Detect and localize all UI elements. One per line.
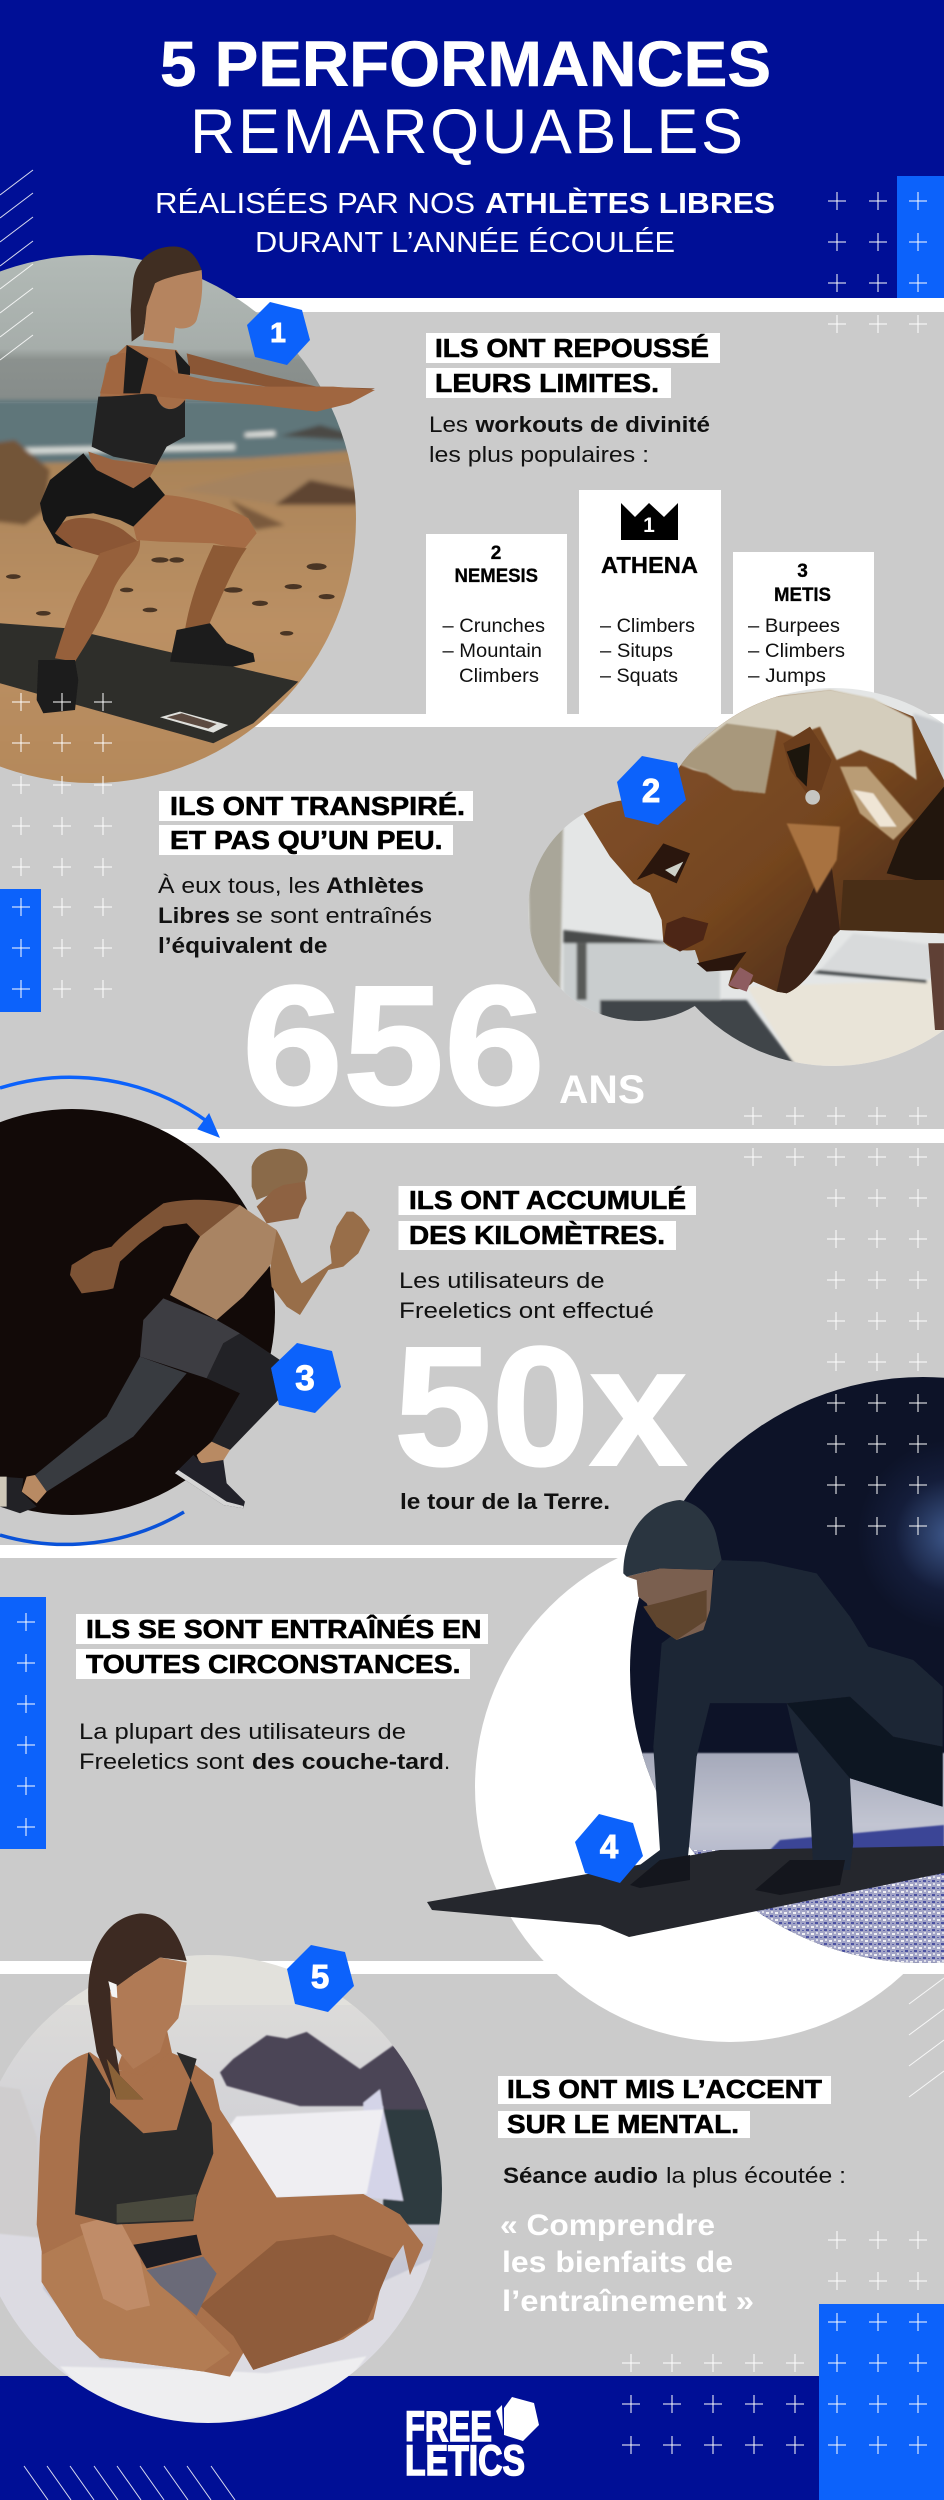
text: users bbox=[399, 1268, 654, 1323]
title: 5 PERFORMANCES bbox=[160, 28, 771, 100]
text: tour de la terre: le tour de la Terre. bbox=[400, 1489, 610, 1514]
plus grid right section 2-3 bbox=[744, 1107, 927, 1371]
diagonal lines bottom left bbox=[24, 2466, 235, 2500]
badge 1: 1 bbox=[270, 317, 286, 348]
text: couche-tard: La plupart des utilisateurs de bbox=[79, 1719, 406, 1744]
podium: metis: 3 bbox=[797, 561, 808, 582]
diagonal lines top left bbox=[0, 170, 33, 242]
text: trained: l’équivalent de bbox=[158, 933, 328, 958]
text: workouts bbox=[429, 412, 710, 467]
heading 4: TOUTES CIRCONSTANCES. bbox=[86, 1649, 460, 1679]
quote: l’entraînement » bbox=[502, 2285, 754, 2318]
heading 1: LEURS LIMITES. bbox=[435, 368, 659, 398]
text: users: Les utilisateurs de bbox=[399, 1268, 604, 1293]
plus grid top right bbox=[828, 192, 927, 333]
podium: nemesis: 2 bbox=[491, 543, 501, 564]
title bbox=[160, 28, 771, 167]
podium: metis: – Jumps bbox=[748, 666, 826, 687]
plus grid over photo 4 bbox=[827, 1394, 927, 1535]
title: REMARQUABLES bbox=[190, 97, 743, 167]
podium: nemesis: – Mountain bbox=[442, 641, 542, 662]
badge 5 bbox=[287, 1945, 354, 2012]
logo: freeletics: LETICS bbox=[405, 2437, 525, 2485]
podium: athena: – Climbers bbox=[600, 616, 695, 637]
photo 2: athlete face bbox=[520, 680, 944, 1080]
subtitle: DURANT L’ANNÉE ÉCOULÉE bbox=[255, 226, 675, 259]
heading 4: ILS SE SONT ENTRAÎNÉS EN bbox=[86, 1614, 482, 1644]
heading 5 bbox=[498, 2074, 831, 2139]
icon: crown: 1 bbox=[643, 514, 655, 537]
heading 4 bbox=[76, 1614, 488, 1679]
heading 5: ILS ONT MIS L’ACCENT bbox=[507, 2074, 822, 2104]
blue block bottom right bbox=[819, 2304, 944, 2500]
photo 1: woman squatting on the beach bbox=[0, 247, 380, 800]
blue strip section 4 bbox=[0, 1597, 46, 1849]
photo 3: runner bbox=[0, 1109, 370, 1515]
big number 50x: 50x bbox=[394, 1312, 687, 1502]
text: trained: Athlètes bbox=[326, 873, 424, 898]
badge 3 bbox=[271, 1343, 341, 1413]
podium: athena bbox=[579, 490, 721, 715]
icon: crown bbox=[621, 503, 678, 540]
badge 2 bbox=[617, 756, 686, 825]
photo 5: woman meditating bbox=[0, 1914, 450, 2441]
plus grid bottom right bbox=[622, 2231, 927, 2454]
plus grid left bbox=[12, 693, 112, 876]
heading 1 bbox=[426, 333, 720, 398]
diagonal lines over photo 1 bbox=[0, 241, 33, 360]
text: trained: À eux tous, les bbox=[158, 873, 320, 898]
badge 1 bbox=[247, 302, 310, 365]
text: seance audio: Séance audio bbox=[503, 2163, 658, 2188]
badge 4: 4 bbox=[600, 1828, 619, 1865]
podium: metis: – Climbers bbox=[748, 641, 845, 662]
podium: athena: – Squats bbox=[600, 666, 678, 687]
text: workouts: les plus populaires : bbox=[429, 442, 649, 467]
heading 3: ILS ONT ACCUMULÉ bbox=[409, 1185, 686, 1215]
podium: metis: – Burpees bbox=[748, 616, 840, 637]
podium: nemesis: NEMESIS bbox=[454, 566, 538, 587]
podium: nemesis: – Crunches bbox=[442, 616, 545, 637]
logo: freeletics bbox=[405, 2397, 539, 2485]
text: seance audio: la plus écoutée : bbox=[666, 2163, 846, 2188]
text: trained bbox=[158, 873, 432, 958]
heading 3: DES KILOMÈTRES. bbox=[409, 1220, 665, 1250]
podium: nemesis: Climbers bbox=[459, 666, 539, 687]
big number 656 ans: ANS bbox=[559, 1068, 645, 1112]
text: couche-tard bbox=[79, 1719, 450, 1774]
diagonal lines section 5 right bbox=[909, 1978, 944, 2097]
subtitle bbox=[155, 186, 775, 259]
text: trained: Libres bbox=[158, 903, 230, 928]
heading 2: ILS ONT TRANSPIRÉ. bbox=[170, 791, 465, 821]
quote: les bienfaits de bbox=[502, 2246, 733, 2279]
badge 2: 2 bbox=[642, 772, 660, 809]
photo 4: man doing push-up bbox=[427, 1370, 944, 1970]
badge 3: 3 bbox=[295, 1359, 315, 1398]
text: trained: se sont entraînés bbox=[236, 903, 432, 928]
badge 4 bbox=[575, 1814, 643, 1883]
podium: athena: – Situps bbox=[600, 641, 673, 662]
podium: metis bbox=[733, 552, 874, 715]
quote: « Comprendre bbox=[500, 2209, 715, 2242]
subtitle: ATHLÈTES LIBRES bbox=[485, 186, 775, 220]
podium: metis: METIS bbox=[774, 585, 831, 606]
heading 2 bbox=[159, 791, 473, 855]
quote bbox=[500, 2209, 754, 2318]
blue accent block top right bbox=[897, 176, 944, 298]
arrow: blue arc around photo 3 bbox=[0, 1077, 219, 1544]
text: workouts: workouts de divinité bbox=[474, 412, 710, 437]
subtitle: RÉALISÉES PAR NOS bbox=[155, 187, 475, 220]
photo 4 white circle bbox=[475, 1532, 944, 2042]
heading 1: ILS ONT REPOUSSÉ bbox=[435, 333, 709, 363]
podium: nemesis bbox=[426, 534, 567, 715]
text: workouts: Les bbox=[429, 412, 468, 437]
text: users: Freeletics ont effectué bbox=[399, 1298, 654, 1323]
plus grid left lower bbox=[12, 898, 112, 998]
text: couche-tard: Freeletics sont bbox=[79, 1749, 244, 1774]
blue accent block left bbox=[0, 889, 41, 1012]
text: couche-tard: des couche-tard bbox=[252, 1749, 444, 1774]
heading 5: SUR LE MENTAL. bbox=[507, 2109, 739, 2139]
podium: athena: ATHENA bbox=[601, 552, 698, 578]
heading 2: ET PAS QU’UN PEU. bbox=[170, 825, 442, 855]
text: couche-tard: . bbox=[444, 1749, 450, 1774]
big number 656 ans: 656 bbox=[242, 951, 545, 1141]
heading 3 bbox=[398, 1185, 696, 1250]
badge 5: 5 bbox=[311, 1958, 329, 1995]
text: seance audio bbox=[503, 2163, 846, 2188]
logo: freeletics: FREE bbox=[405, 2403, 492, 2451]
